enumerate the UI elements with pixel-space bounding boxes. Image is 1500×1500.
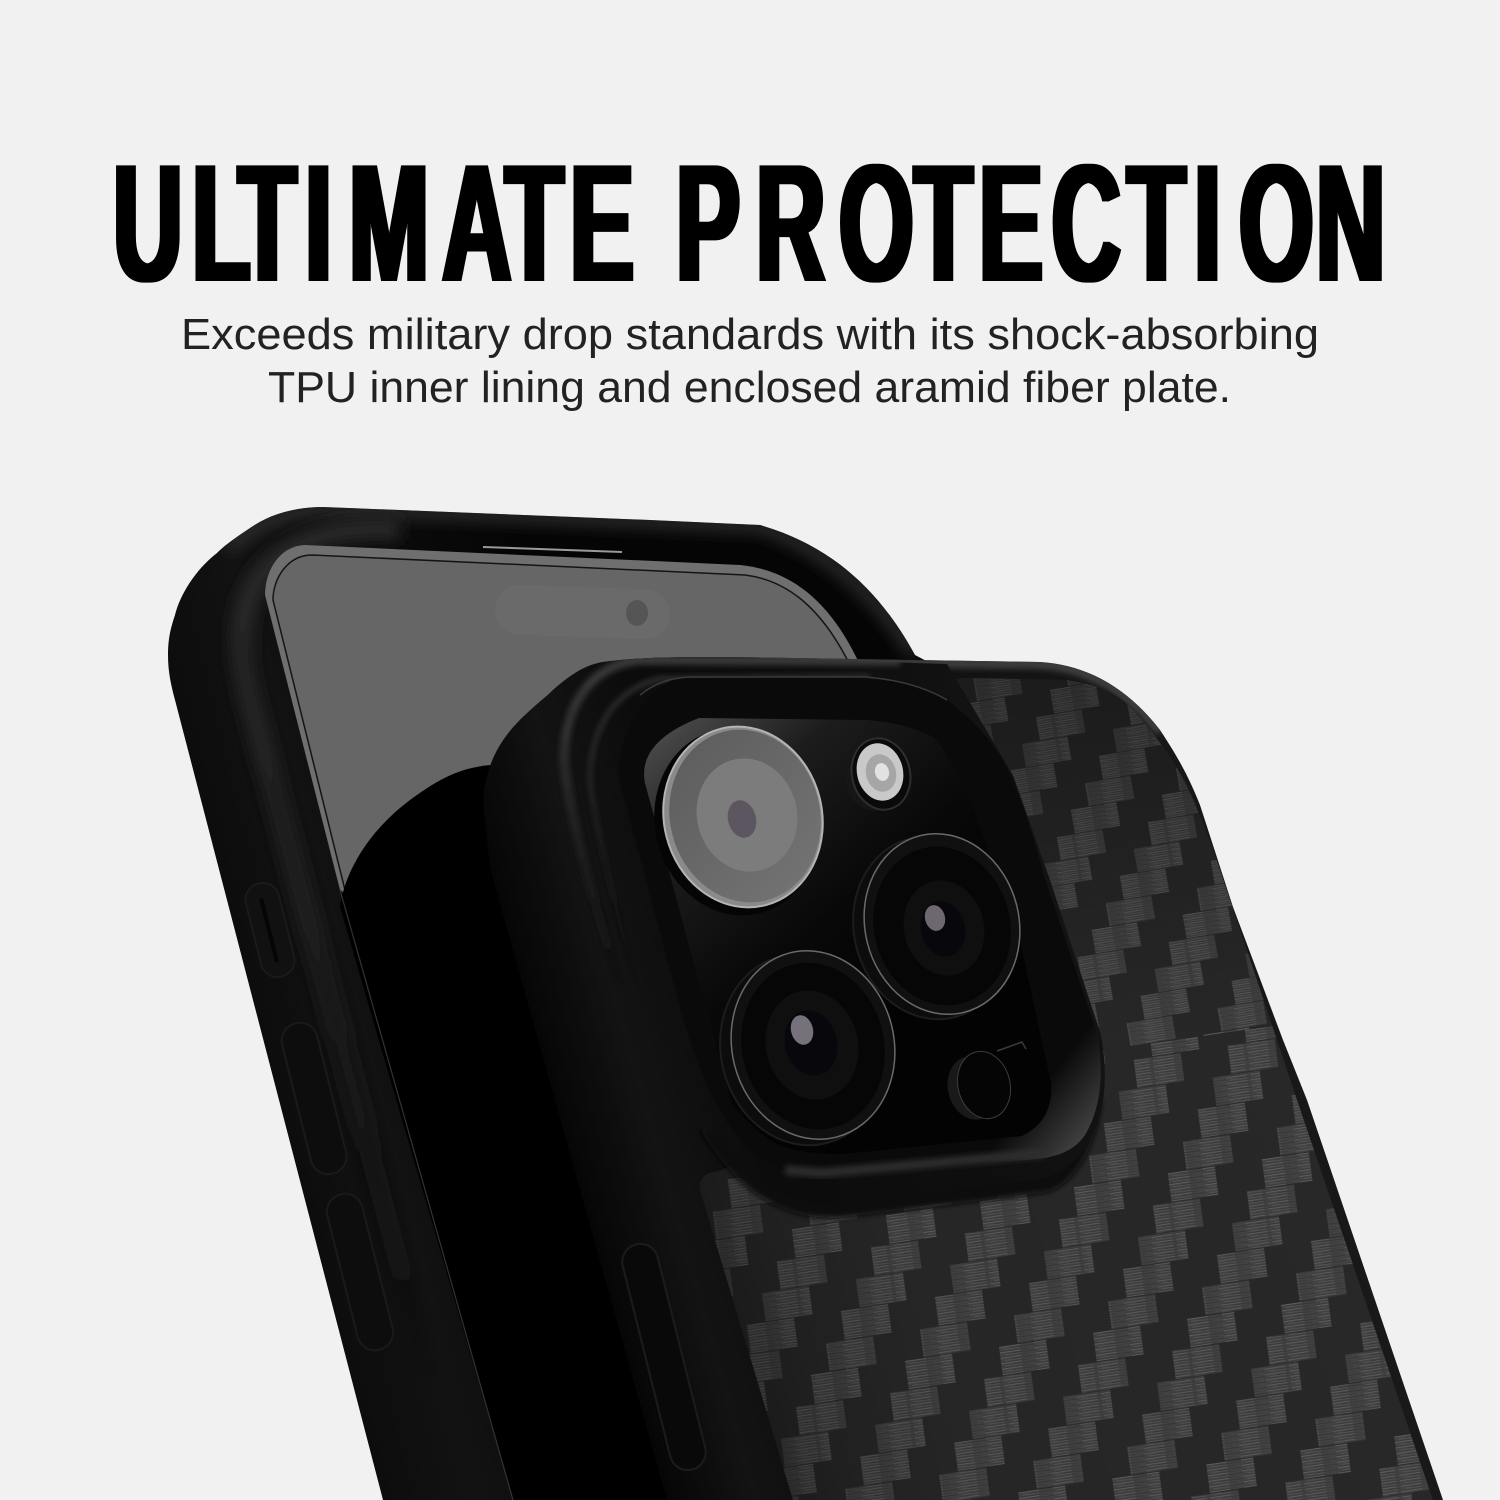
black reflection on the screen <box>340 765 680 1500</box>
screen bezel <box>265 545 860 1000</box>
case bumper <box>168 507 1000 1500</box>
side action button <box>618 1240 710 1474</box>
telephoto lens <box>834 817 1039 1036</box>
microphone slit <box>997 1042 1026 1051</box>
camera frame rim <box>619 677 1101 1178</box>
subtitle <box>181 310 1319 412</box>
dynamic island <box>494 584 671 640</box>
main lens <box>635 710 842 933</box>
rim top edge light <box>640 677 947 700</box>
flash <box>838 732 918 817</box>
camera bump <box>483 657 1105 1218</box>
subtitle: TPU inner lining and enclosed aramid fiber plate. <box>268 363 1231 412</box>
glass plate <box>644 718 1051 1154</box>
rear body <box>483 657 1443 1500</box>
top edge light <box>758 658 1162 736</box>
infographic canvas <box>116 164 1443 1500</box>
phone: rear view in case <box>483 650 1460 1500</box>
screen glass <box>273 555 850 1000</box>
title: ULTIMATE PROTECTION <box>113 129 1385 317</box>
bump shadow <box>700 1100 1102 1218</box>
volume down button <box>323 1190 397 1354</box>
front camera <box>626 600 648 626</box>
ultrawide lens <box>700 933 915 1163</box>
rim bottom light <box>785 1153 1045 1173</box>
subtitle: Exceeds military drop standards with its shock-absorbing <box>181 310 1319 359</box>
mute switch <box>242 879 298 981</box>
carbon fiber plate <box>690 650 1460 1500</box>
bump ridge highlights <box>558 657 902 858</box>
volume up button <box>278 1019 350 1178</box>
phone: front view in case <box>168 507 1000 1500</box>
top earpiece highlight <box>483 547 622 552</box>
bumper soft highlights <box>228 508 915 1380</box>
lidar sensor <box>941 1046 1017 1125</box>
bezel line <box>340 890 513 1500</box>
bump outer shell <box>483 657 1105 1205</box>
